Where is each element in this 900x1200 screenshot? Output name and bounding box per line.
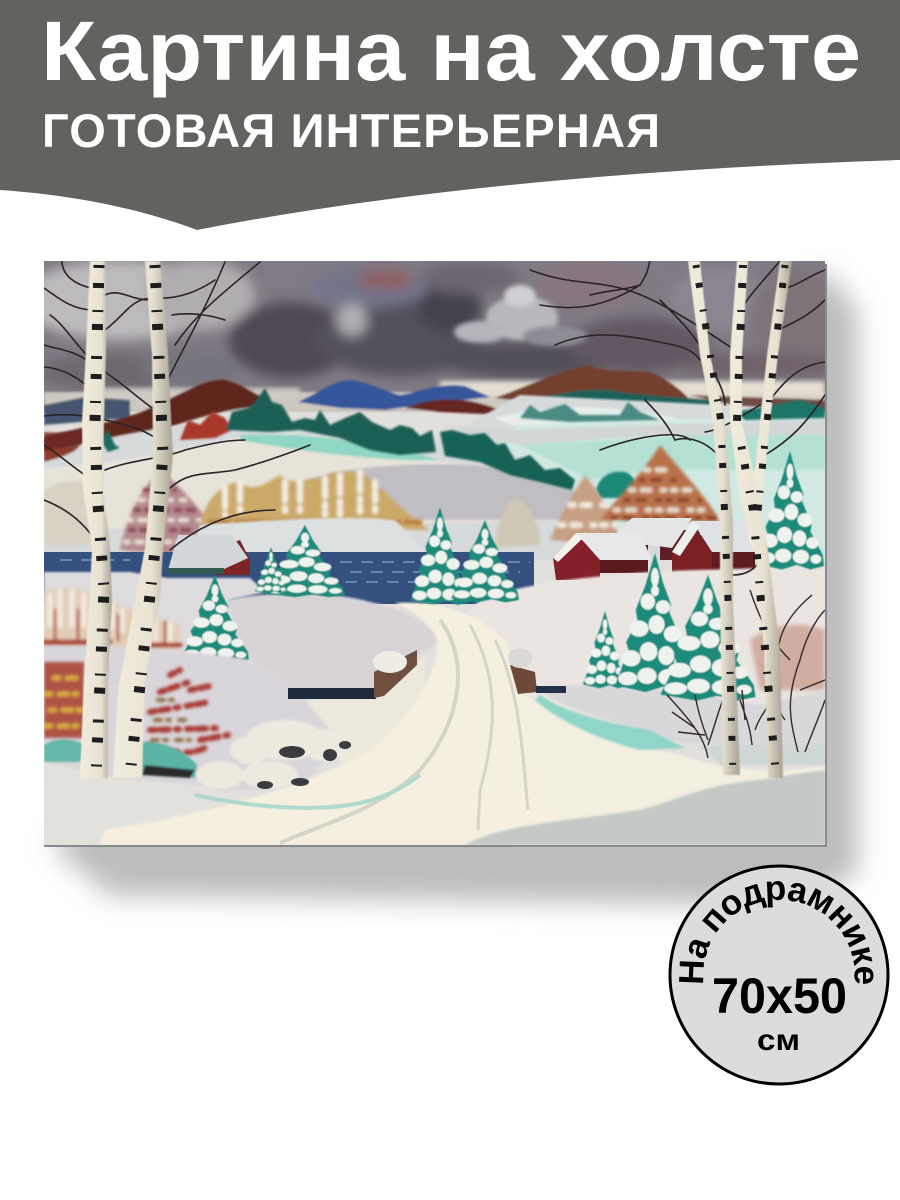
teal shadow and lower field bbox=[535, 685, 825, 765]
canvas drop shadow bbox=[44, 264, 858, 906]
size badge bbox=[668, 864, 890, 1086]
bridge with stone posts bbox=[288, 648, 566, 699]
teal snow drifts bbox=[44, 739, 197, 778]
badge size: 70x50 bbox=[712, 968, 847, 1024]
right barns bbox=[553, 518, 755, 580]
snow boulders and rocks bbox=[196, 720, 351, 789]
lower right snow drift bbox=[465, 770, 825, 845]
title: Картина на холсте bbox=[41, 4, 861, 98]
left shore snow bbox=[44, 570, 264, 604]
river bbox=[44, 552, 534, 604]
cream snowbank left of road bbox=[306, 658, 424, 764]
main snow mound bbox=[228, 594, 438, 697]
left barn bbox=[168, 535, 250, 575]
blush bushes at right edge bbox=[750, 625, 825, 690]
painting: winter landscape bbox=[20, 260, 840, 845]
distant mountains bbox=[44, 366, 825, 452]
snow road bbox=[100, 603, 560, 845]
evergreen treelines bbox=[100, 388, 825, 498]
cream snowbank right of road bbox=[521, 694, 825, 820]
evergreen firs bbox=[181, 451, 824, 701]
upper left shrubs bbox=[44, 588, 180, 650]
birch trees bbox=[80, 261, 792, 778]
bare branches bbox=[44, 261, 825, 575]
right snow field bbox=[468, 562, 825, 704]
foreground snow bbox=[44, 761, 207, 790]
badge arc label: На подрамнике bbox=[679, 881, 874, 984]
sky bbox=[20, 260, 840, 411]
badge unit: см bbox=[757, 1024, 800, 1057]
snowfields bbox=[44, 395, 825, 580]
autumn and frosted trees bbox=[44, 445, 720, 555]
snowy near bank bbox=[196, 516, 406, 535]
header banner bbox=[0, 0, 900, 230]
subtitle: ГОТОВАЯ ИНТЕРЬЕРНАЯ bbox=[42, 104, 660, 157]
lower left snow hill bbox=[45, 650, 326, 789]
bare shrubs bbox=[667, 590, 825, 758]
red autumn bushes bbox=[44, 662, 228, 752]
